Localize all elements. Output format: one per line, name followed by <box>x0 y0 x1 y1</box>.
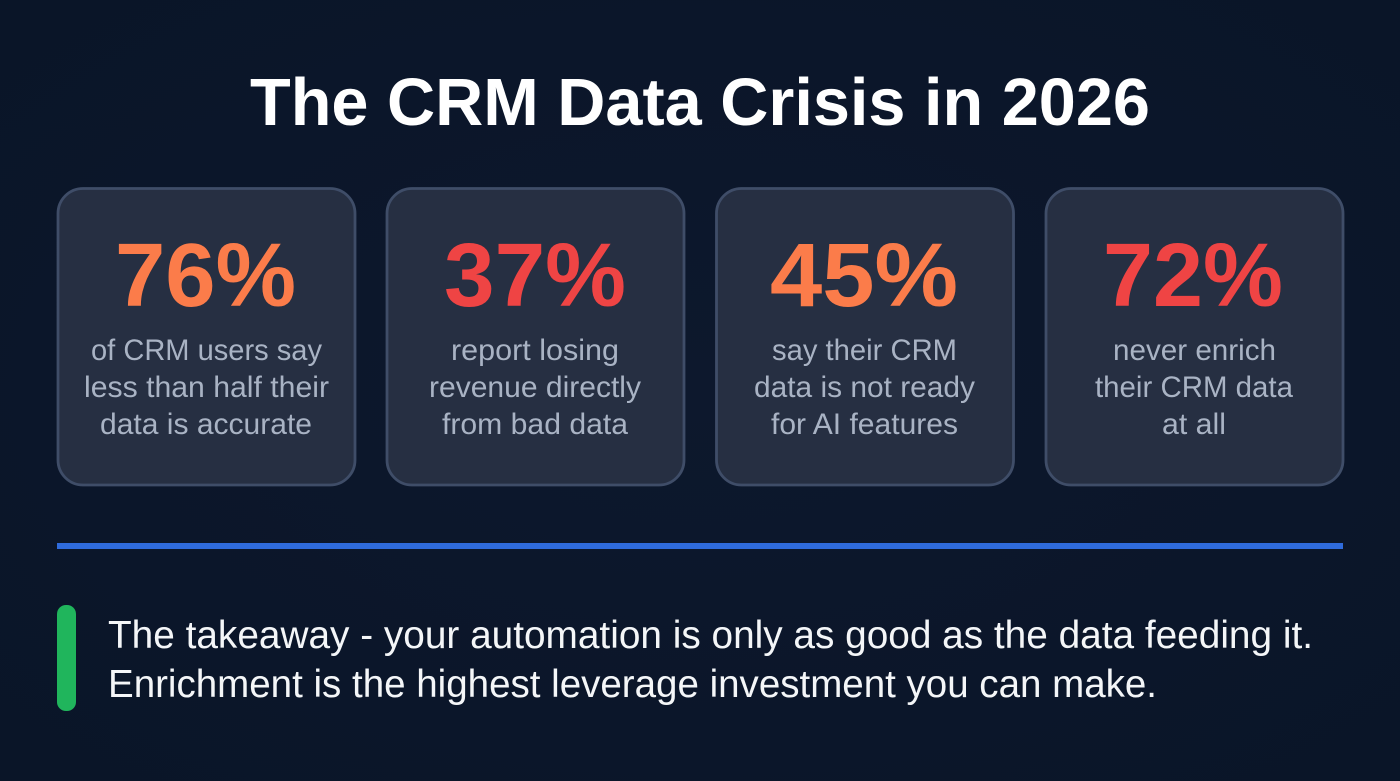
stat description: 37%: revenue directly <box>429 371 641 404</box>
stat description: 72%: at all <box>1162 408 1226 441</box>
stat number: 37%: 37% <box>444 226 626 326</box>
stat number: 76%: 76% <box>115 226 296 326</box>
stat description: 37%: report losing <box>451 334 619 367</box>
stat description: 72% <box>1095 334 1294 441</box>
stat description: 76% <box>84 334 329 441</box>
takeaway text <box>108 614 1313 706</box>
stat description: 76%: less than half their <box>84 371 329 404</box>
divider: blue line <box>57 543 1343 549</box>
stat description: 37%: from bad data <box>442 408 629 441</box>
stat description: 72%: their CRM data <box>1095 371 1294 404</box>
takeaway accent bar <box>57 605 76 711</box>
title: The CRM Data Crisis in 2026 <box>250 65 1150 140</box>
panel: 45% stat <box>716 188 1014 485</box>
panel: 37% stat <box>387 188 684 485</box>
stat description: 45%: data is not ready <box>754 371 975 404</box>
stat description: 72%: never enrich <box>1113 334 1276 367</box>
takeaway text: The takeaway - your automation is only as good as the data feeding it. <box>108 614 1313 657</box>
stat description: 45%: for AI features <box>771 408 958 441</box>
stat description: 45%: say their CRM <box>772 334 957 367</box>
stat description: 76%: data is accurate <box>100 408 312 441</box>
takeaway text: Enrichment is the highest leverage investment you can make. <box>108 663 1157 706</box>
stat number: 45%: 45% <box>770 226 958 326</box>
stat description: 76%: of CRM users say <box>91 334 322 367</box>
stat description: 37% <box>429 334 641 441</box>
panel: 76% stat <box>58 188 355 485</box>
stat number: 72%: 72% <box>1103 226 1283 326</box>
stat description: 45% <box>754 334 975 441</box>
panel: 72% stat <box>1046 188 1343 485</box>
